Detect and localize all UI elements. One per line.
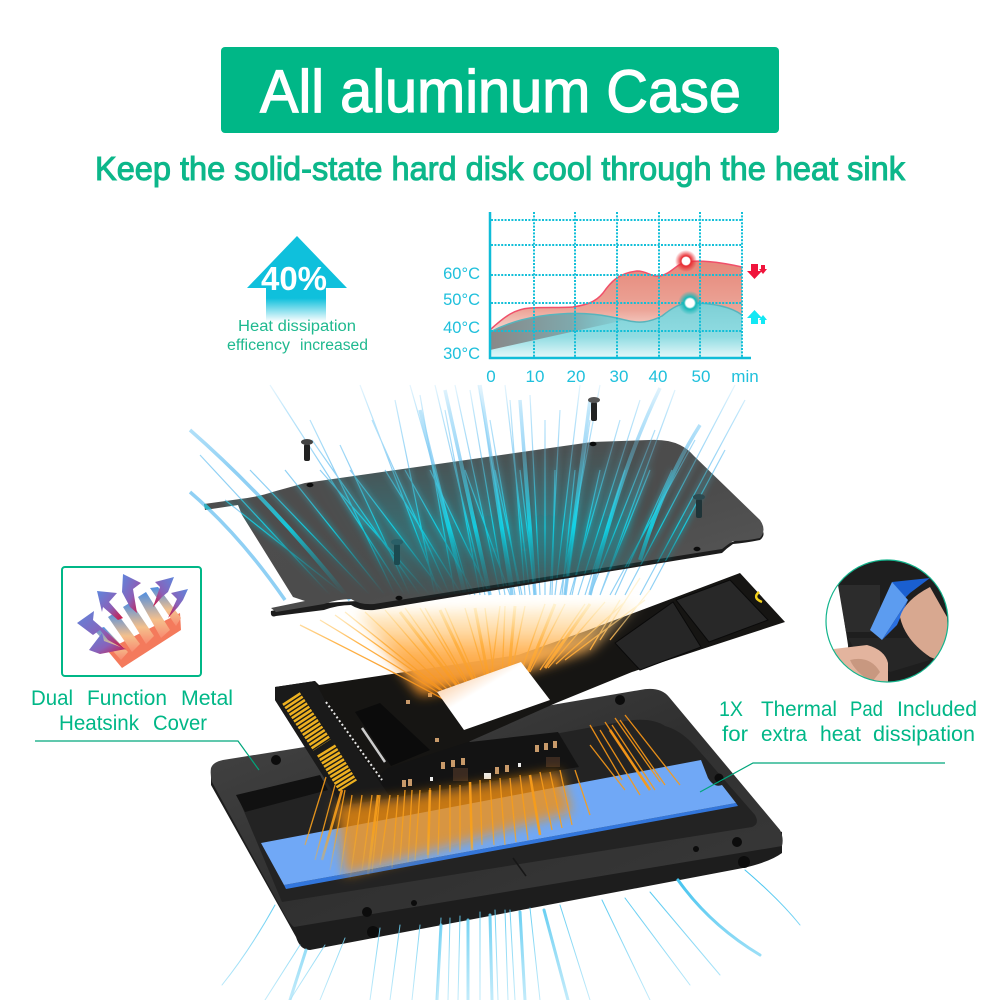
caption: extra (761, 723, 807, 746)
rays: cool air under case (222, 870, 800, 1000)
U.2 connector body (275, 681, 391, 806)
caption: Thermal (761, 698, 837, 721)
callout: thermal pad (700, 555, 977, 792)
caption: Heat dissipation (238, 318, 356, 335)
grey overlap (490, 313, 625, 350)
gold contacts (291, 698, 348, 786)
x axis labels: min (731, 367, 759, 386)
M.2 board (275, 573, 785, 805)
callout: heatsink cover (31, 567, 259, 770)
teal line (490, 303, 742, 332)
icon: up arrow (247, 236, 347, 322)
case recess (238, 720, 757, 902)
top metal cover (204, 440, 764, 616)
memory chip 2 (676, 580, 768, 642)
screw 3 (693, 494, 705, 518)
arrows: temperature down (747, 264, 767, 279)
x axis labels: 20 (567, 367, 585, 386)
adapter circuit board (275, 573, 785, 806)
connector slot (236, 775, 328, 812)
surface components (402, 693, 560, 787)
caption: Function (87, 687, 167, 710)
rays: heat over boards (305, 715, 680, 880)
cool rays over cover (204, 440, 715, 594)
leader line (35, 741, 259, 770)
x axis labels: 30 (610, 367, 628, 386)
callout: 40% heat dissipation (227, 236, 368, 354)
leader line (700, 763, 945, 792)
arrows: heat up (747, 310, 767, 324)
lower PCB (332, 700, 579, 798)
marker: red peak (675, 250, 697, 272)
caption: efficency (227, 337, 290, 354)
x axis labels: 0 (486, 367, 496, 386)
bottom case (211, 689, 783, 950)
line chart: temperature over time (443, 212, 767, 386)
yellow notch (756, 592, 762, 602)
title banner (221, 47, 779, 133)
caption: for (722, 723, 748, 746)
M.2 socket (355, 703, 430, 766)
percentage: 40% (261, 260, 327, 297)
hot chip highlight (437, 662, 550, 730)
marker: teal peak (678, 291, 702, 315)
y axis labels: 30°C (443, 345, 480, 363)
caption: dissipation (873, 723, 975, 746)
caption: increased (300, 337, 368, 354)
rays: cool air above cover (190, 385, 745, 600)
caption: Metal (181, 687, 233, 710)
cover edge (271, 530, 764, 616)
soft heat band (335, 772, 572, 875)
blue thermal pad (261, 760, 738, 889)
y axis labels: 50°C (443, 291, 480, 309)
cover plate (204, 440, 764, 612)
caption: Dual (31, 687, 73, 710)
photo: peeling thermal pad (825, 559, 949, 683)
teal area (490, 303, 742, 357)
x axis labels: 50 (692, 367, 710, 386)
caption: 1X (719, 698, 743, 721)
icon: heatsink with arrows (77, 574, 188, 668)
screws (301, 397, 705, 565)
grid (491, 212, 742, 357)
subtitle: Keep the solid-state hard disk cool through the heat sink (95, 150, 905, 187)
icon frame (62, 567, 201, 676)
axes (490, 212, 751, 358)
caption (719, 698, 977, 746)
memory chip 1 (615, 602, 701, 670)
screw 4 (391, 539, 403, 565)
y axis labels: 60°C (443, 265, 480, 283)
red line (490, 261, 742, 330)
cover holes (306, 442, 700, 600)
caption: heat (820, 723, 861, 746)
screw 1 (301, 439, 313, 461)
case top face (211, 689, 783, 927)
case side wall (211, 770, 782, 950)
caption: Pad (850, 698, 883, 721)
caption: Heatsink (59, 712, 139, 735)
x axis labels: 10 (526, 367, 544, 386)
x axis labels: 40 (649, 367, 667, 386)
caption: Included (897, 698, 977, 721)
title banner: All aluminum Case (260, 58, 741, 125)
case screw holes (271, 695, 750, 938)
rays: heat below cover (300, 578, 650, 700)
contact pins (326, 702, 382, 780)
screw 2 (588, 397, 600, 421)
exploded product view (31, 385, 977, 1000)
y axis labels: 40°C (443, 319, 480, 337)
red area (490, 261, 742, 357)
caption: Cover (153, 712, 207, 735)
soft heat wedge (355, 604, 640, 695)
caption (31, 687, 233, 735)
